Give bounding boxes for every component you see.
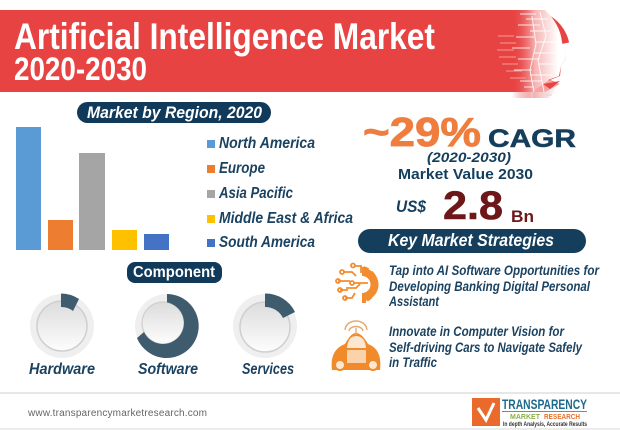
panel: strategies — [332, 263, 600, 370]
icon: AI head — [497, 10, 580, 98]
strategy text 2 — [389, 324, 583, 370]
market value number: 2.8 — [443, 184, 503, 228]
stat: CAGR percent: ~29% — [363, 109, 481, 155]
header banner — [0, 10, 580, 98]
legend: Europe — [219, 160, 265, 177]
logo: TRANSPARENCY — [502, 396, 587, 412]
donut: services — [233, 293, 297, 358]
legend: North America — [219, 135, 315, 152]
heading: key market strategies — [358, 229, 586, 253]
panel: CAGR and market value — [363, 109, 576, 228]
donut: software — [135, 294, 199, 358]
legend — [207, 135, 353, 251]
panel: market by region — [16, 102, 353, 251]
heading: component: Component — [133, 264, 216, 281]
icon: self-driving car — [332, 321, 380, 370]
stat: CAGR label: CAGR — [488, 125, 576, 153]
label: hardware: Hardware — [29, 361, 95, 378]
label: software: Software — [138, 361, 198, 378]
currency: US$ — [396, 197, 426, 216]
logo — [472, 396, 588, 428]
strategy text 1 — [388, 263, 600, 309]
unit: Bn — [511, 207, 534, 226]
strategy text 1: Developing Banking Digital Personal — [389, 279, 590, 294]
legend: Middle East & Africa — [219, 210, 353, 227]
label: services: Services — [242, 361, 294, 378]
donut: hardware — [30, 294, 94, 358]
footer — [0, 392, 620, 430]
logo: MARKET — [510, 412, 540, 421]
legend: South America — [219, 234, 315, 251]
title: Artificial Intelligence Market — [14, 15, 435, 57]
strategy text 1: Assistant — [388, 294, 439, 309]
subtitle: years: 2020-2030 — [14, 51, 147, 87]
period: (2020-2030) — [427, 150, 512, 165]
strategy text 2: Innovate in Computer Vision for — [389, 324, 565, 339]
legend: Asia Pacific — [218, 185, 293, 202]
website url: www.transparencymarketresearch.com — [27, 408, 207, 419]
bar chart — [16, 127, 169, 250]
logo: In depth Analysis, Accurate Results — [503, 422, 588, 428]
panel: component — [29, 262, 297, 378]
heading: market by region: Market by Region, 2020 — [87, 104, 263, 122]
strategy text 2: Self-driving Cars to Navigate Safely — [389, 340, 583, 355]
strategy text 2: in Traffic — [389, 355, 437, 370]
logo: RESEARCH — [544, 412, 580, 421]
market value label: Market Value 2030 — [398, 166, 533, 183]
heading: key market strategies: Key Market Strategies — [388, 230, 554, 250]
icon: gear with circuit — [336, 264, 375, 303]
